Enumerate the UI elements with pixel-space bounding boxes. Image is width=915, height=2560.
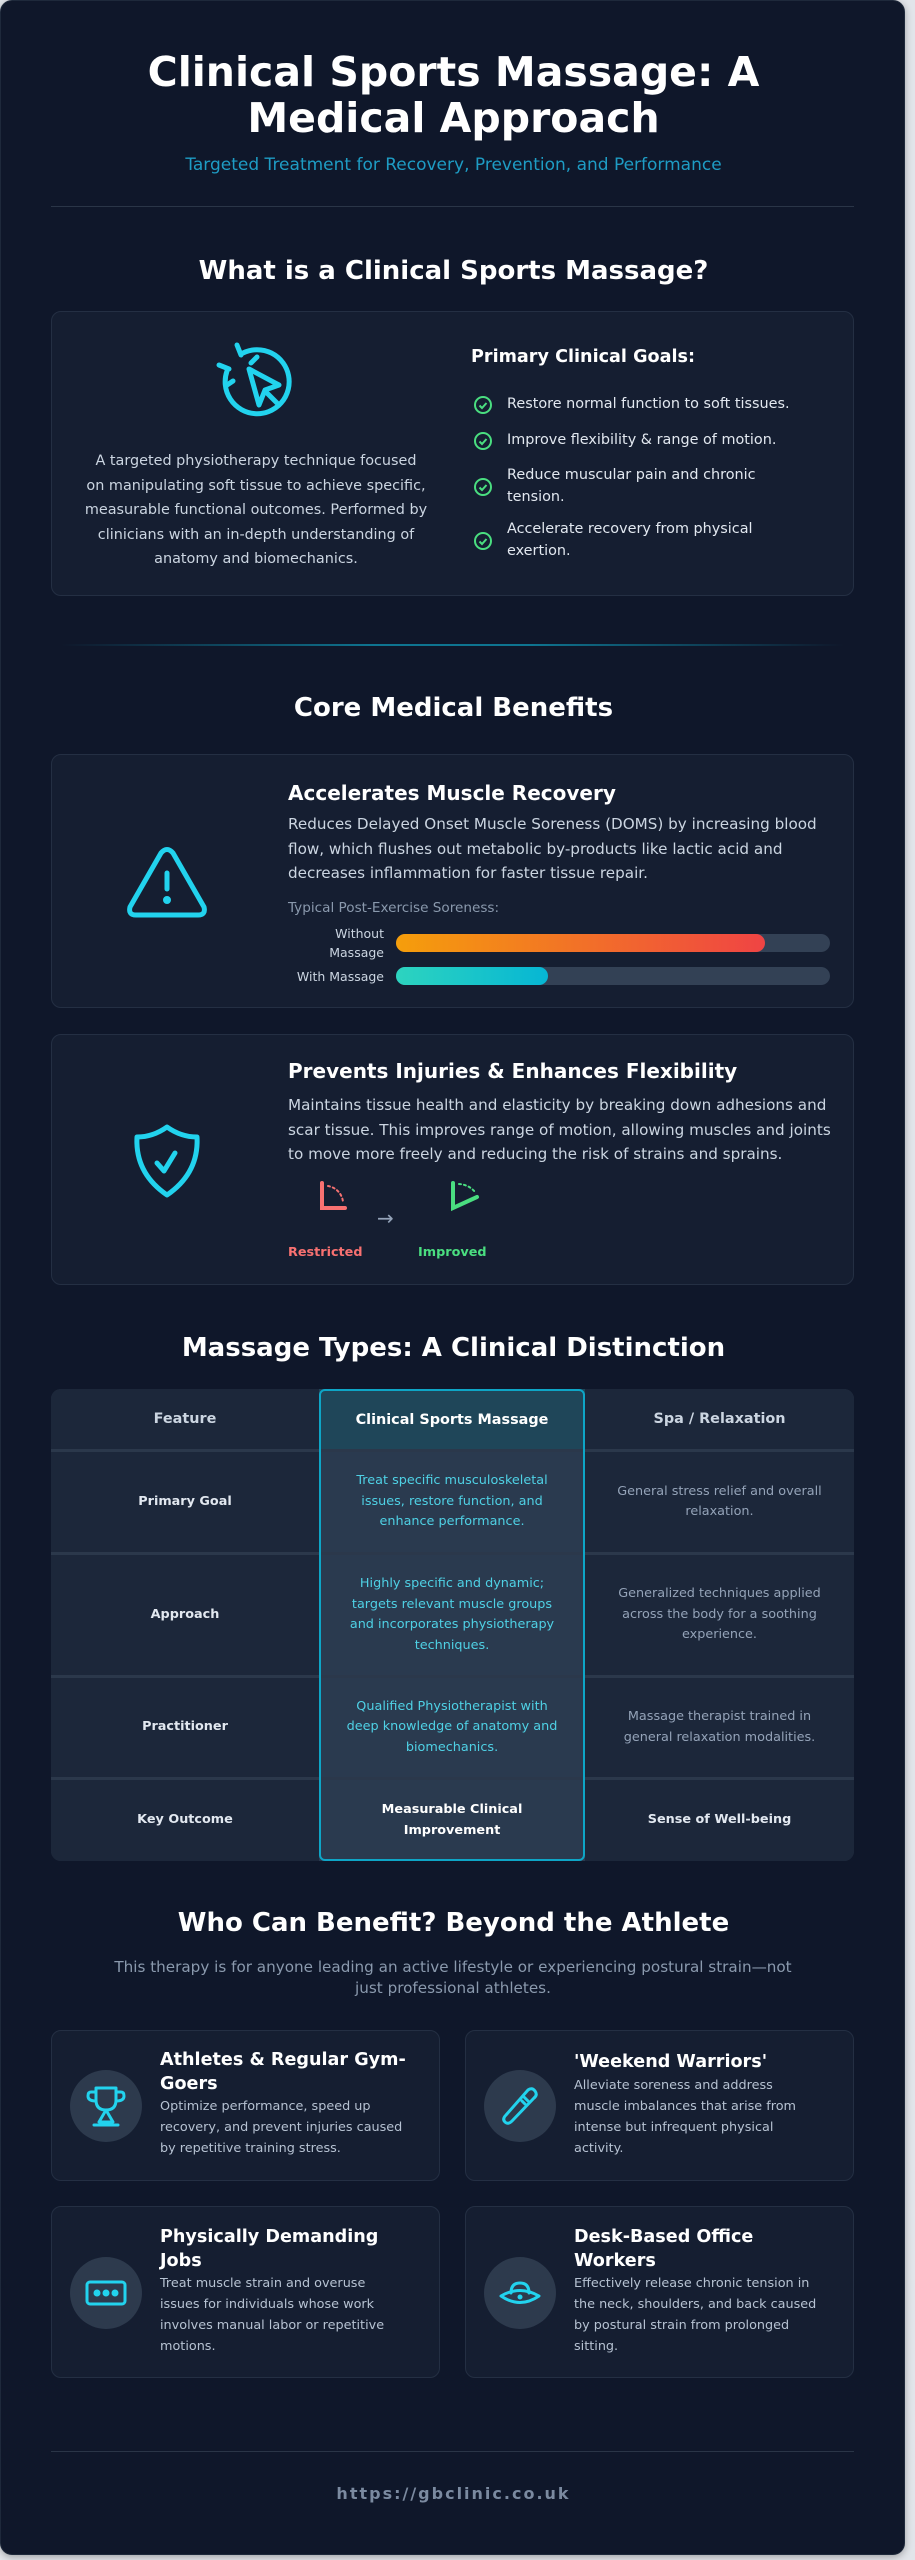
bar chart: Massage <box>329 945 384 960</box>
comparison table: across the body for a soothing <box>622 1607 817 1622</box>
goal 3 <box>474 467 756 504</box>
panel: recovery <box>51 754 854 1008</box>
panel: definition <box>51 311 854 596</box>
icon: warning <box>127 847 207 918</box>
comparison table: Highly specific and dynamic; <box>360 1576 544 1591</box>
description: Maintains tissue health and elasticity by breaking down adhesions and <box>288 1096 826 1114</box>
comparison table: General stress relief and overall <box>617 1484 822 1498</box>
icon: hat <box>484 2257 556 2329</box>
text: definition: clinicians with an in-depth understanding of <box>98 526 414 542</box>
row: primary goal: Primary Goal <box>138 1494 232 1509</box>
comparison table: techniques. <box>415 1638 489 1652</box>
card: weekend warriors: muscle imbalances that arise from <box>574 2098 796 2114</box>
comparison table: issues, restore function, and <box>361 1494 543 1509</box>
comparison table: deep knowledge of anatomy and <box>347 1719 557 1734</box>
description: scar tissue. This improves range of motion, allowing muscles and joints <box>288 1120 831 1138</box>
card: physical jobs: Jobs <box>160 2250 202 2270</box>
card: weekend warriors <box>465 2030 854 2181</box>
panel: injuries <box>51 1034 854 1285</box>
card: athletes: Goers <box>160 2074 218 2094</box>
title <box>148 48 760 142</box>
icon: shield <box>134 1124 200 1198</box>
card: physical jobs: motions. <box>160 2339 216 2354</box>
card: weekend warriors: Alleviate soreness and address <box>574 2078 773 2092</box>
icon: target cursor <box>216 342 292 416</box>
card: office workers: the neck, shoulders, and back caused <box>574 2297 816 2312</box>
text: definition: measurable functional outcomes. Performed by <box>85 502 427 518</box>
goal 3: Reduce muscular pain and chronic <box>507 467 756 483</box>
header row: Feature <box>154 1411 216 1427</box>
comparison table: Massage therapist trained in <box>628 1709 811 1724</box>
arrow: → <box>377 1206 394 1230</box>
card: athletes: recovery, and prevent injuries caused <box>160 2120 402 2135</box>
card: physical jobs: Treat muscle strain and overuse <box>160 2276 365 2291</box>
comparison table: and incorporates physiotherapy <box>350 1617 554 1632</box>
card: athletes: Athletes & Regular Gym- <box>160 2050 406 2070</box>
label restricted: Restricted <box>288 1245 363 1260</box>
icon: restricted angle <box>320 1181 347 1210</box>
card: athletes: by repetitive training stress. <box>160 2141 341 2156</box>
goal 4 <box>474 521 753 558</box>
comparison table: relaxation. <box>685 1504 754 1519</box>
comparison table: Clinical Sports Massage <box>356 1412 548 1428</box>
title: Medical Approach <box>247 94 660 142</box>
bar chart: Without <box>335 926 384 941</box>
row: approach: Approach <box>151 1607 219 1622</box>
label: Typical Post-Exercise Soreness: <box>288 900 499 916</box>
footer url: https://gbclinic.co.uk <box>336 2484 571 2503</box>
goal 4: exertion. <box>507 542 571 558</box>
heading: who can benefit: Who Can Benefit? Beyond the Athlete <box>178 1908 729 1938</box>
text: definition: on manipulating soft tissue to achieve specific, <box>86 478 426 494</box>
comparison table: Spa / Relaxation <box>653 1411 786 1427</box>
title: Accelerates Muscle Recovery <box>288 781 616 805</box>
comparison table: Improvement <box>404 1822 500 1838</box>
text: definition: anatomy and biomechanics. <box>154 551 358 567</box>
comparison table: general relaxation modalities. <box>624 1730 815 1744</box>
row: practitioner: Practitioner <box>142 1719 228 1734</box>
row: key outcome: Key Outcome <box>137 1812 233 1827</box>
heading: core benefits: Core Medical Benefits <box>294 693 613 723</box>
description: Reduces Delayed Onset Muscle Soreness (DOMS) by increasing blood <box>288 815 817 833</box>
bar chart: With Massage <box>297 969 384 984</box>
card: weekend warriors: intense but infrequent physical <box>574 2120 773 2134</box>
card: office workers: Effectively release chronic tension in <box>574 2276 809 2291</box>
card: physical jobs: issues for individuals whose work <box>160 2297 374 2312</box>
comparison table: Qualified Physiotherapist with <box>356 1699 548 1714</box>
card: athletes <box>51 2030 440 2181</box>
text: definition <box>85 453 427 567</box>
title: Clinical Sports Massage: A <box>148 48 759 96</box>
goal 2: Improve flexibility & range of motion. <box>507 432 776 448</box>
comparison table: Measurable Clinical <box>382 1802 522 1817</box>
goal 1: Restore normal function to soft tissues. <box>507 396 790 412</box>
card: office workers: Workers <box>574 2250 656 2270</box>
description <box>288 815 817 882</box>
subtitle: Targeted Treatment for Recovery, Prevention, and Performance <box>185 155 722 175</box>
icon: trophy <box>70 2070 142 2142</box>
label improved: Improved <box>418 1245 487 1260</box>
card: office workers: by postural strain from prolonged <box>574 2318 789 2333</box>
comparison table: enhance performance. <box>379 1514 525 1529</box>
goal 3: tension. <box>507 488 565 504</box>
icon: improved angle <box>451 1181 480 1212</box>
heading: goals: Primary Clinical Goals: <box>471 347 695 367</box>
goal 4: Accelerate recovery from physical <box>507 521 753 537</box>
heading: what is: What is a Clinical Sports Massage? <box>199 256 708 286</box>
comparison table: experience. <box>682 1627 757 1642</box>
icon: syringe <box>484 2070 556 2142</box>
comparison table: Treat specific musculoskeletal <box>356 1473 548 1488</box>
comparison table <box>51 1389 854 1861</box>
text: definition: A targeted physiotherapy technique focused <box>95 453 417 469</box>
heading: massage types: Massage Types: A Clinical Distinction <box>182 1333 725 1363</box>
card: physical jobs: Physically Demanding <box>160 2227 378 2247</box>
title: Prevents Injuries & Enhances Flexibility <box>288 1059 737 1083</box>
card: office workers: Desk-Based Office <box>574 2227 753 2247</box>
card: weekend warriors: 'Weekend Warriors' <box>574 2052 767 2072</box>
card: weekend warriors: activity. <box>574 2140 623 2156</box>
comparison table: targets relevant muscle groups <box>352 1596 552 1612</box>
intro text: This therapy is for anyone leading an active lifestyle or experiencing postural strain—not just professional athletes. <box>114 1958 792 1997</box>
card: office workers <box>465 2206 854 2378</box>
comparison table: Sense of Well-being <box>648 1812 791 1827</box>
description: decreases inflammation for faster tissue repair. <box>288 864 648 882</box>
card: physical jobs: involves manual labor or repetitive <box>160 2318 384 2333</box>
description: flow, which flushes out metabolic by-products like lactic acid and <box>288 840 782 858</box>
comparison table: biomechanics. <box>406 1740 498 1755</box>
bar chart <box>297 926 830 985</box>
comparison table: Generalized techniques applied <box>618 1586 821 1601</box>
card: office workers: sitting. <box>574 2339 618 2354</box>
description <box>288 1096 831 1163</box>
card: athletes: Optimize performance, speed up <box>160 2099 370 2114</box>
description: to move more freely and reducing the risk of strains and sprains. <box>288 1145 782 1163</box>
icon: dots box <box>70 2257 142 2329</box>
card: physical jobs <box>51 2206 440 2378</box>
